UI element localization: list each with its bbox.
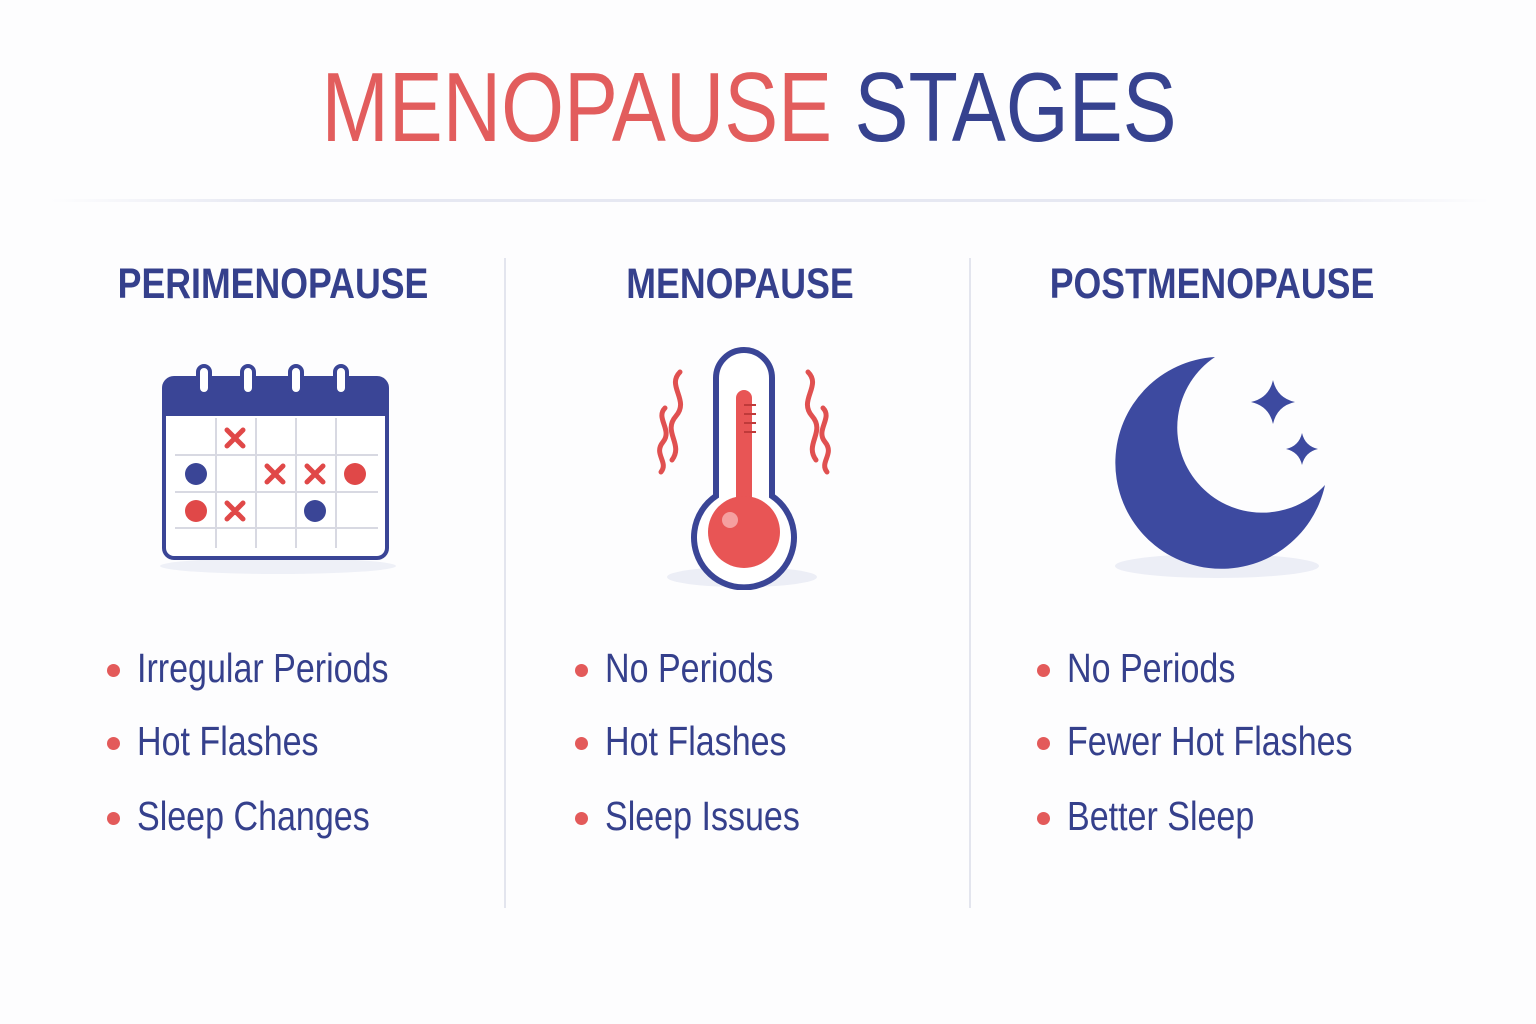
icon: calendar <box>160 364 396 574</box>
list: menopause <box>575 645 800 839</box>
list: perimenopause: Irregular Periods <box>137 645 389 691</box>
heading: menopause: MENOPAUSE <box>626 260 854 308</box>
list: postmenopause: Fewer Hot Flashes <box>1067 718 1353 764</box>
list: perimenopause: Sleep Changes <box>137 793 370 839</box>
icon: thermometer <box>657 347 831 590</box>
list: postmenopause: No Periods <box>1067 645 1235 691</box>
list: menopause: Hot Flashes <box>605 718 787 764</box>
list: perimenopause: Hot Flashes <box>137 718 319 764</box>
heading: perimenopause: PERIMENOPAUSE <box>118 260 428 308</box>
list: perimenopause <box>107 645 389 839</box>
list: postmenopause: Better Sleep <box>1067 793 1254 839</box>
list: menopause: Sleep Issues <box>605 793 800 839</box>
list: postmenopause <box>1037 645 1353 839</box>
title: MENOPAUSE STAGES <box>321 52 1177 162</box>
heading: postmenopause: POSTMENOPAUSE <box>1050 260 1374 308</box>
list: menopause: No Periods <box>605 645 773 691</box>
icon: moon with stars <box>1115 357 1325 578</box>
